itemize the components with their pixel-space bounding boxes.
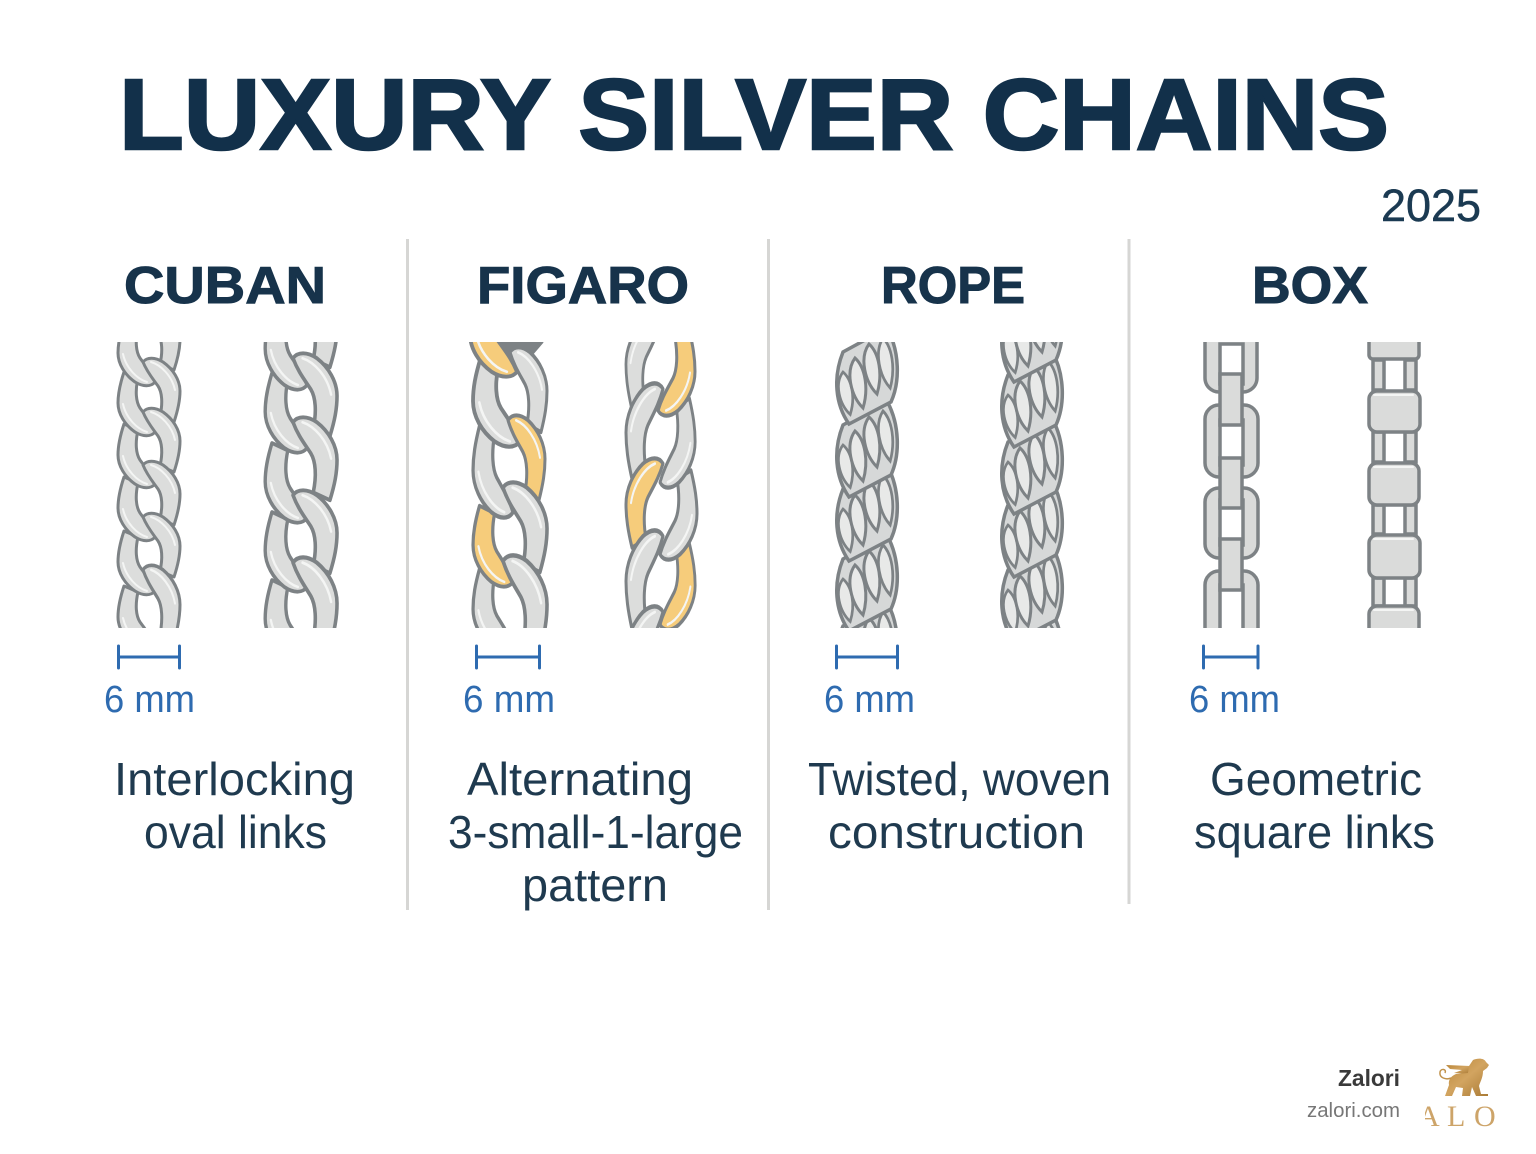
heading: rope: ROPE — [881, 257, 1025, 315]
description: Twisted, woven — [808, 753, 1111, 805]
width marker — [1204, 646, 1258, 668]
chain: box front view — [1205, 320, 1258, 661]
description: construction — [828, 806, 1085, 858]
description: Alternating — [467, 753, 693, 805]
description: square links — [1194, 806, 1435, 858]
description — [448, 753, 743, 911]
description: Interlocking — [114, 753, 355, 805]
description: oval links — [144, 806, 327, 858]
chain: rope front view — [835, 342, 900, 628]
chain: rope side view — [1000, 342, 1064, 628]
description — [1194, 753, 1435, 858]
description — [114, 753, 355, 858]
chain: box side view — [1369, 330, 1420, 646]
panel: figaro — [448, 257, 743, 911]
width marker — [476, 646, 540, 668]
brand url: zalori.com — [1307, 1100, 1400, 1122]
heading: box: BOX — [1252, 257, 1368, 315]
chain: cuban front view — [116, 342, 182, 628]
size label: 6 mm — [463, 679, 555, 721]
width marker — [118, 646, 180, 668]
panel: rope — [808, 257, 1111, 858]
chain: cuban side view — [264, 342, 339, 628]
description: 3-small-1-large — [448, 806, 743, 858]
title: LUXURY SILVER CHAINS — [119, 59, 1389, 171]
size label: 6 mm — [824, 679, 915, 721]
logo wordmark: ALO — [1418, 1100, 1496, 1133]
width marker — [836, 646, 898, 668]
chain: figaro side view — [624, 342, 698, 628]
heading: cuban: CUBAN — [124, 257, 326, 315]
size label: 6 mm — [1189, 679, 1280, 721]
chain: figaro front view — [469, 342, 549, 628]
brand name: Zalori — [1338, 1065, 1400, 1091]
panel: box — [1189, 257, 1435, 858]
description — [808, 753, 1111, 858]
size label: 6 mm — [104, 679, 195, 721]
heading: figaro: FIGARO — [477, 257, 689, 315]
year label: 2025 — [1381, 180, 1481, 231]
icon: gold lion logo — [1440, 1059, 1489, 1096]
description: Geometric — [1210, 753, 1422, 805]
description: pattern — [522, 859, 668, 911]
panel: cuban — [104, 257, 355, 858]
